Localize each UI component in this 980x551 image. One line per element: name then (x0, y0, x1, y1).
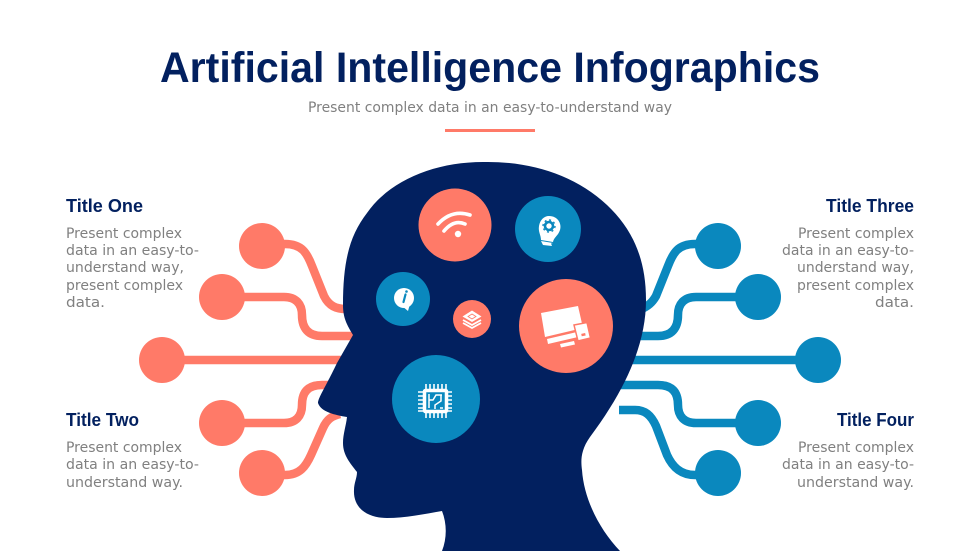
text block: title two: Title Two (66, 410, 139, 430)
connector network: left coral (139, 223, 354, 496)
text block: title four: understand way. (797, 475, 914, 491)
subtitle: Present complex data in an easy-to-understand way (308, 100, 672, 116)
icon: monitor and tablet badge (519, 279, 613, 373)
text block: title one: Title One (66, 196, 143, 216)
icon: light bulb badge (515, 196, 581, 262)
text block: title one (66, 196, 199, 311)
text block: title one: data. (66, 295, 105, 311)
text block: title two: data in an easy-to- (66, 457, 199, 473)
icon: wifi badge (418, 188, 492, 262)
text block: title three: Title Three (826, 196, 914, 216)
text block: title four: Present complex (798, 440, 914, 456)
connector network: right blue (615, 223, 841, 496)
text block: title two (66, 410, 199, 491)
head silhouette (318, 162, 646, 551)
text block: title one: understand way, (66, 260, 184, 276)
title underline (445, 129, 535, 132)
text block: title one: data in an easy-to- (66, 243, 199, 259)
text block: title three: Present complex (798, 226, 914, 242)
text block: title three: understand way, (797, 260, 914, 276)
text block: title three: data in an easy-to- (782, 243, 914, 259)
icon: layers badge (453, 300, 491, 338)
text block: title four: data in an easy-to- (782, 457, 914, 473)
text block: title one: Present complex (66, 226, 182, 242)
text block: title three (782, 196, 914, 311)
text block: title four: Title Four (837, 410, 914, 430)
text block: title three: present complex (797, 278, 914, 294)
icon: microchip badge (392, 355, 480, 443)
text block: title four (782, 410, 914, 491)
text block: title one: present complex (66, 278, 183, 294)
icon: info bubble badge (376, 272, 430, 326)
text block: title two: Present complex (66, 440, 182, 456)
text block: title three: data. (875, 295, 914, 311)
title: Artificial Intelligence Infographics (160, 44, 820, 92)
text block: title two: understand way. (66, 475, 183, 491)
